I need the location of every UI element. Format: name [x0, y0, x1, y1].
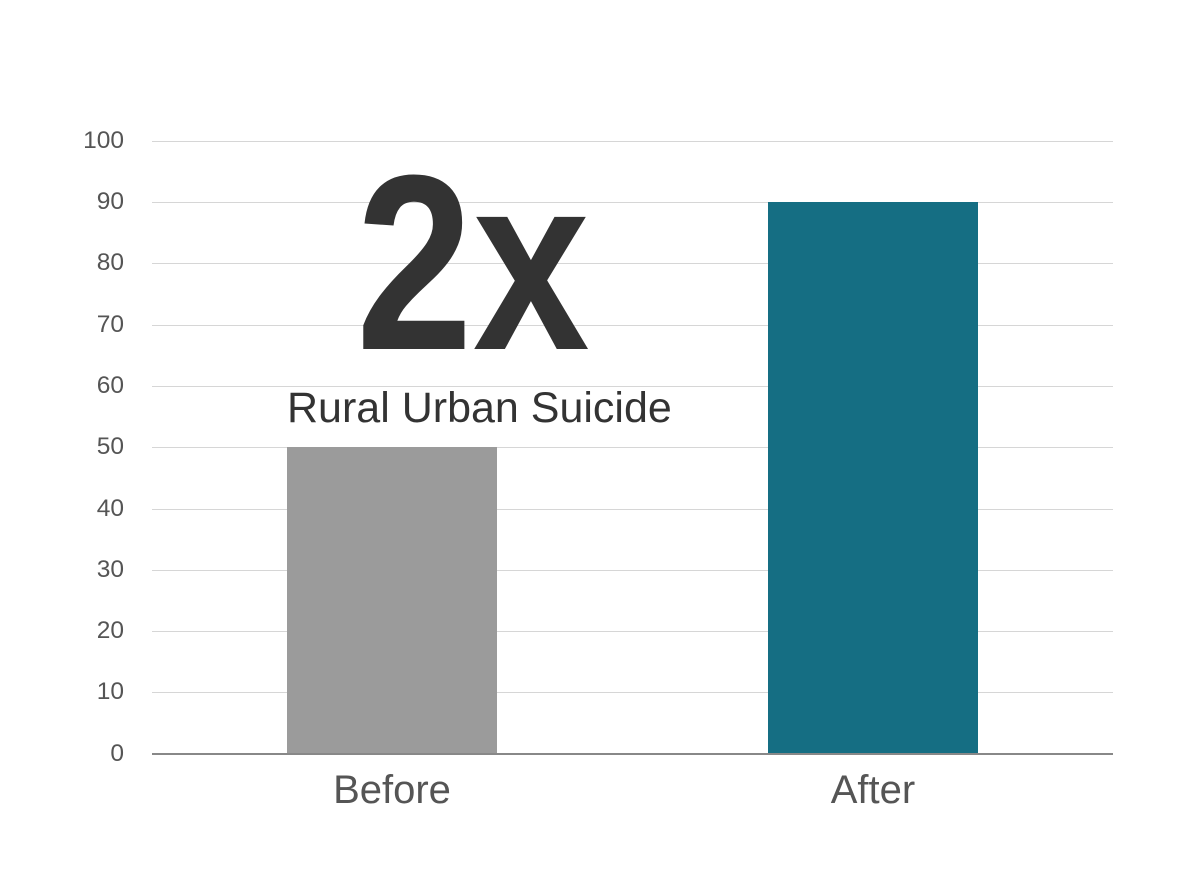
x label: before: Before	[333, 768, 451, 812]
x label: after: After	[831, 768, 915, 812]
y axis labels and gridlines: 100	[83, 127, 124, 154]
y axis labels and gridlines: 30	[97, 556, 124, 583]
y axis labels and gridlines: 80	[97, 249, 124, 276]
bar: after	[768, 202, 978, 754]
y axis labels and gridlines: 20	[97, 617, 124, 644]
y axis labels and gridlines: 90	[97, 188, 124, 215]
y axis labels and gridlines: 60	[97, 372, 124, 399]
callout subtitle: Rural Urban Suicide	[287, 384, 672, 432]
x axis line	[152, 753, 1113, 755]
y axis labels and gridlines: 10	[97, 678, 124, 705]
y axis labels and gridlines: 50	[97, 433, 124, 460]
callout: 2x: 2x	[356, 123, 590, 402]
y axis labels and gridlines: 0	[110, 740, 124, 767]
y axis labels and gridlines: 70	[97, 311, 124, 338]
y axis labels and gridlines: 40	[97, 495, 124, 522]
bar: before	[287, 447, 497, 754]
